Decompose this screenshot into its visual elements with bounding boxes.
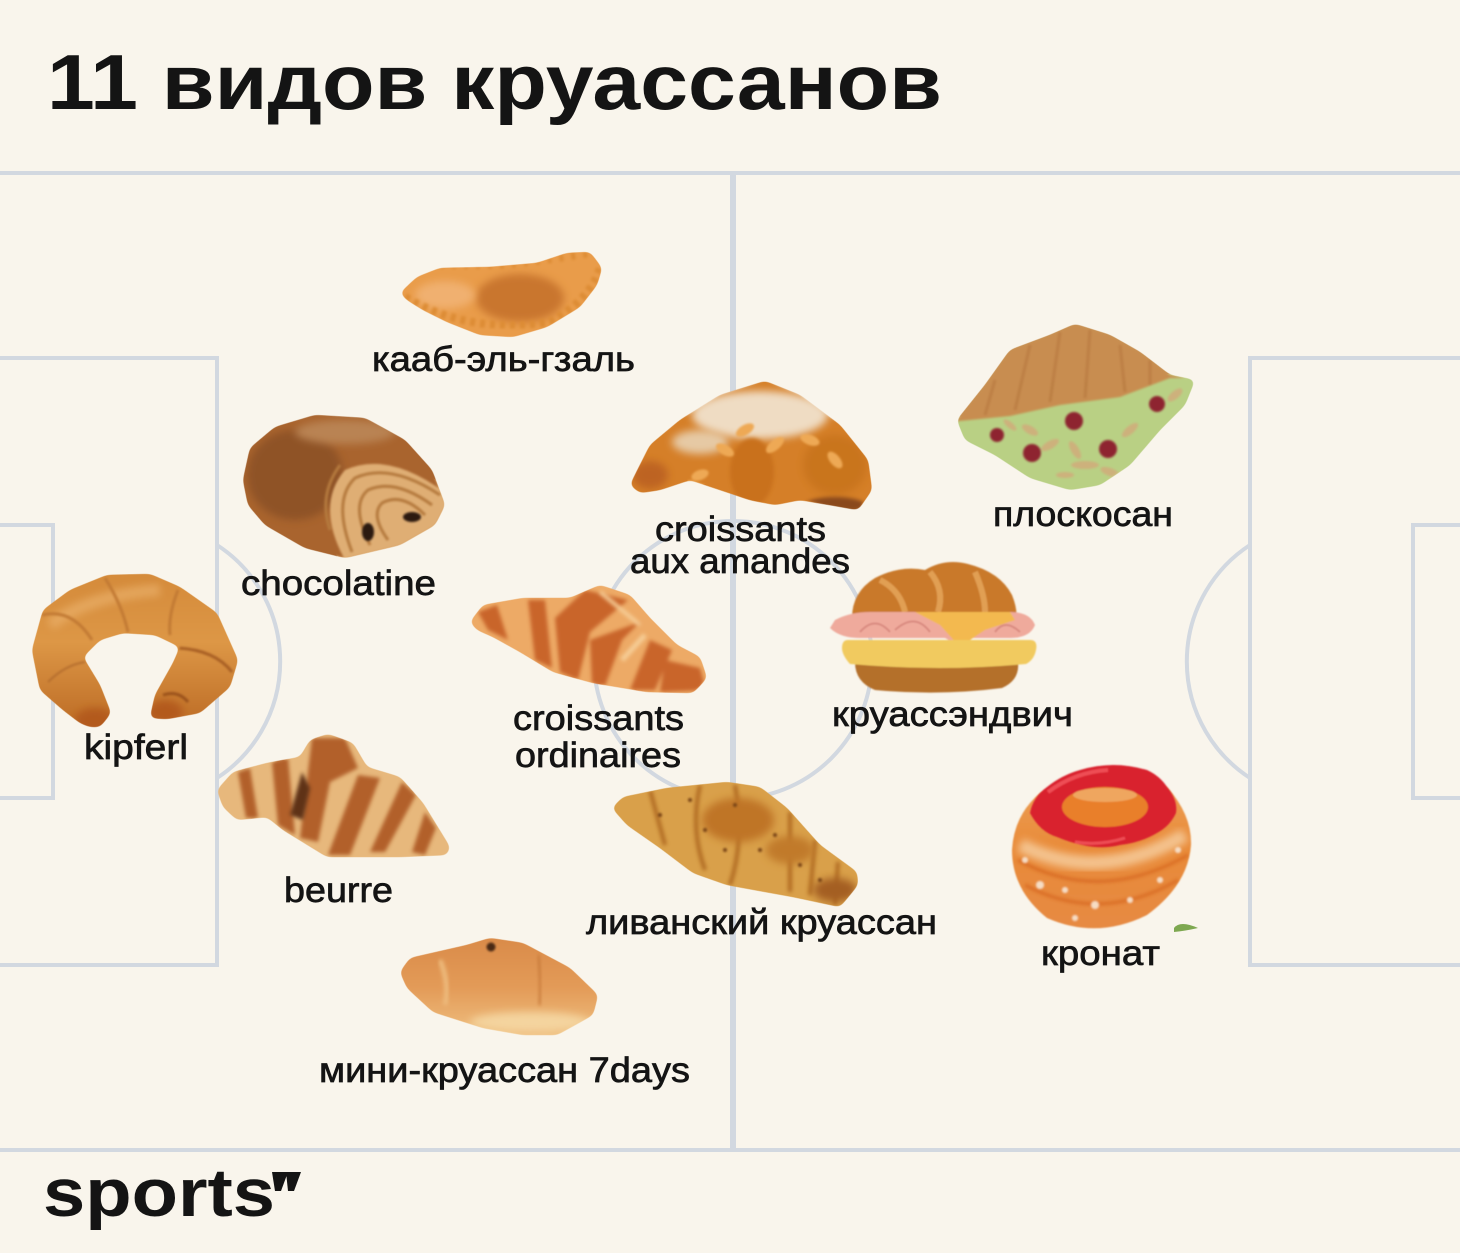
football pitch lines (0, 173, 1460, 1150)
green leaf (1174, 924, 1198, 932)
pastry: chocolatine (240, 410, 450, 560)
pastry: kipferl (32, 574, 238, 728)
item: плоскосан (958, 324, 1194, 527)
label: кронат (1041, 934, 1160, 973)
pastry: кааб-эль-гзаль (402, 252, 602, 338)
label: chocolatine (241, 564, 436, 603)
pastry: мини-круассан 7days (401, 938, 598, 1036)
item: croissants aux amandes (625, 378, 875, 581)
logo: sports: sports (43, 1155, 275, 1231)
cheese and ham (830, 612, 1035, 645)
item: kipferl (25, 570, 245, 767)
pastry: ливанский круассан (614, 782, 858, 906)
label: kipferl (84, 728, 188, 767)
pastry: кронат (1011, 786, 1192, 930)
label: aux amandes (630, 542, 850, 581)
item: croissants ordinaires (465, 582, 710, 775)
pastry: croissants ordinaires (465, 582, 710, 696)
label: ordinaires (515, 736, 681, 775)
label: beurre (284, 871, 393, 910)
label: плоскосан (993, 495, 1173, 534)
top bun (852, 562, 1016, 620)
label (513, 699, 684, 775)
pastry: croissants aux amandes (625, 378, 875, 513)
egg (842, 640, 1036, 668)
item: кронат (1005, 765, 1198, 973)
pastry: плоскосан (958, 324, 1194, 490)
item: мини-круассан 7days (319, 935, 690, 1090)
bottom bun (855, 662, 1018, 693)
label: croissants (513, 699, 684, 738)
item: ливанский круассан (586, 778, 937, 942)
title: 11 видов круассанов (47, 38, 942, 126)
label: круассэндвич (832, 695, 1073, 734)
red glaze (1030, 765, 1176, 847)
sandwich (830, 562, 1036, 693)
label: мини-круассан 7days (319, 1051, 690, 1090)
item: кааб-эль-гзаль (374, 252, 634, 372)
label: ливанский круассан (586, 903, 937, 942)
label (630, 510, 850, 581)
item: beurre (215, 730, 455, 910)
label: кааб-эль-гзаль (372, 340, 635, 379)
label: croissants (655, 510, 826, 549)
pastry: beurre (215, 730, 455, 860)
item: chocolatine (240, 410, 450, 603)
item: круассэндвич (830, 562, 1073, 734)
